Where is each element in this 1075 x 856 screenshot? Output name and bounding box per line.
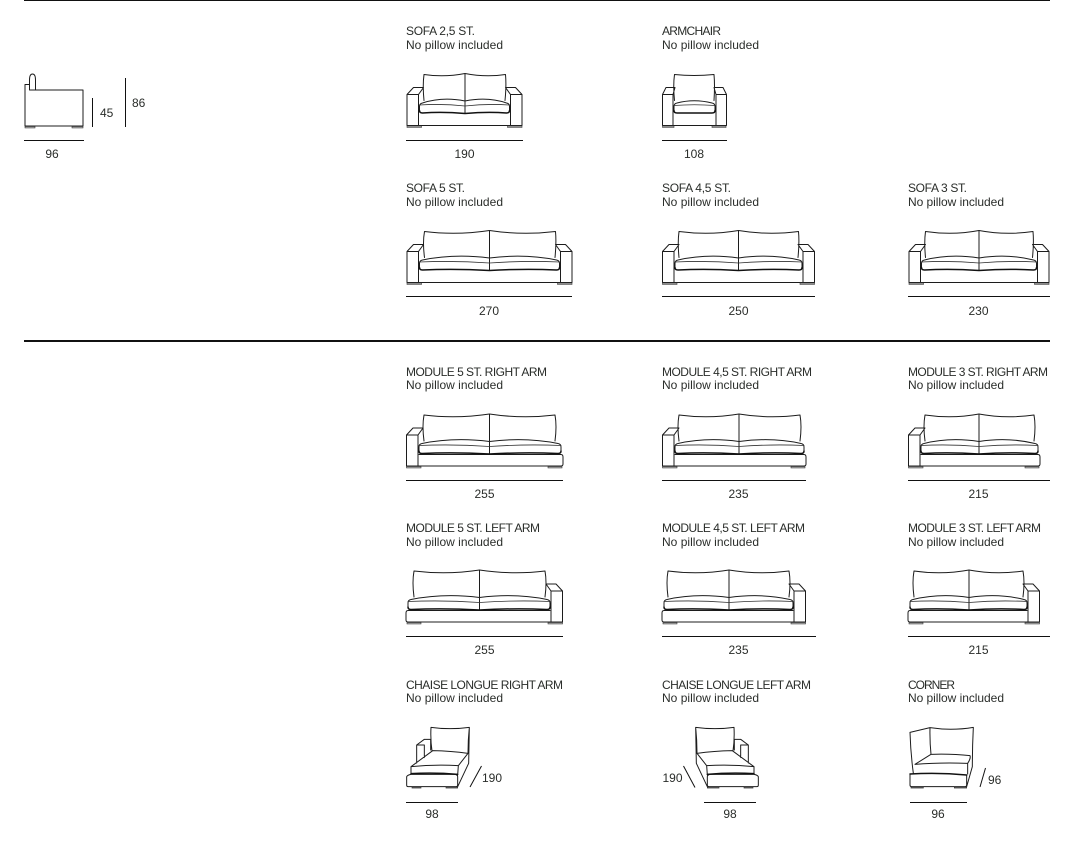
dimension: width 235: 235: [728, 487, 749, 501]
label: SOFA 4,5 ST.: [662, 181, 731, 195]
label: [662, 521, 805, 549]
dimension: seat height: 45: [100, 106, 114, 120]
dimension: depth 190: [470, 766, 502, 787]
dimension: width 255: 255: [474, 643, 495, 657]
dimension: width 96: [910, 802, 967, 821]
label: No pillow included: [662, 535, 759, 549]
dimension: depth 96: [980, 768, 1002, 787]
label: [406, 678, 563, 705]
label: [406, 24, 503, 52]
label: MODULE 4,5 ST. RIGHT ARM: [662, 365, 812, 379]
icon: armchair: [662, 74, 726, 128]
icon: module 3 right arm: [908, 414, 1040, 468]
label: No pillow included: [908, 535, 1004, 549]
icon: chaise left arm: [696, 727, 758, 788]
chaise longue left arm: [662, 678, 811, 821]
label: SOFA 5 ST.: [406, 181, 465, 195]
icon: chaise right arm: [407, 727, 469, 788]
icon: module 3 left arm: [908, 570, 1040, 624]
section divider: [24, 340, 1050, 342]
dimension: width 250: 250: [728, 304, 749, 318]
icon: sofa 3: [909, 230, 1049, 284]
label: [908, 181, 1004, 209]
sofa 2,5 seats: [406, 24, 523, 161]
dimension: width 108: 108: [684, 147, 704, 161]
icon: module 4,5 left arm: [662, 570, 806, 624]
module 5 left arm: [406, 521, 563, 657]
label: CORNER: [908, 678, 955, 692]
label: No pillow included: [406, 378, 503, 392]
label: SOFA 3 ST.: [908, 181, 967, 195]
label: ARMCHAIR: [662, 24, 721, 38]
dimension: width 215: 215: [968, 487, 989, 501]
label: MODULE 3 ST. LEFT ARM: [908, 521, 1041, 535]
label: MODULE 3 ST. RIGHT ARM: [908, 365, 1048, 379]
armchair: [662, 24, 759, 161]
side profile diagram with dimensions: [24, 74, 146, 161]
dimension: width 98: [704, 802, 756, 821]
dimension: width 230: 230: [968, 304, 989, 318]
label: MODULE 4,5 ST. LEFT ARM: [662, 521, 805, 535]
label: [662, 365, 812, 392]
module 4,5 right arm: [662, 365, 812, 501]
label: No pillow included: [908, 195, 1004, 209]
label: [662, 24, 759, 52]
dimension: depth: 96: [45, 147, 59, 161]
label: [406, 521, 540, 549]
label: No pillow included: [406, 195, 503, 209]
module 3 right arm: [908, 365, 1050, 501]
dimension: depth 96: 96: [988, 773, 1002, 787]
label: No pillow included: [406, 535, 503, 549]
label: No pillow included: [406, 38, 503, 52]
corner: [908, 678, 1004, 821]
module 3 left arm: [908, 521, 1050, 657]
label: [662, 181, 759, 209]
label: MODULE 5 ST. LEFT ARM: [406, 521, 540, 535]
label: [908, 678, 1004, 705]
dimension: width 190: 190: [454, 147, 475, 161]
icon: sofa 4,5: [662, 230, 814, 284]
top rule: [24, 0, 1050, 1]
label: No pillow included: [406, 691, 503, 705]
dimension: total height: 86: [132, 96, 146, 110]
dimension: depth 190: 190: [482, 771, 502, 785]
dimension: width 235: 235: [728, 643, 749, 657]
label: No pillow included: [662, 38, 759, 52]
module 5 right arm: [406, 365, 563, 501]
icon: corner: [910, 727, 973, 788]
label: MODULE 5 ST. RIGHT ARM: [406, 365, 547, 379]
icon: module 5 right arm: [406, 414, 563, 468]
icon: module 4,5 right arm: [662, 414, 806, 468]
module 4,5 left arm: [662, 521, 816, 657]
chaise longue right arm: [406, 678, 563, 821]
label: No pillow included: [662, 195, 759, 209]
label: CHAISE LONGUE RIGHT ARM: [406, 678, 563, 692]
label: No pillow included: [908, 691, 1004, 705]
dimension: depth 190: 190: [662, 771, 683, 785]
dimension: depth 190: [662, 766, 695, 788]
label: [406, 181, 503, 209]
label: No pillow included: [662, 378, 759, 392]
sofa 3 seats: [908, 181, 1050, 318]
label: [662, 678, 811, 705]
dimension: width 270: 270: [479, 304, 499, 318]
label: [908, 521, 1041, 549]
dimension: width 215: 215: [968, 643, 989, 657]
dimension: width 98: [406, 802, 458, 821]
sofa 4,5 seats: [662, 181, 815, 318]
icon: sofa 2,5: [407, 74, 522, 128]
sofa 5 seats: [406, 181, 572, 318]
dimension: width 96: 96: [931, 807, 945, 821]
icon: sofa side profile: [25, 74, 83, 128]
label: [406, 365, 547, 392]
label: [908, 365, 1048, 392]
label: CHAISE LONGUE LEFT ARM: [662, 678, 811, 692]
icon: module 5 left arm: [406, 570, 562, 624]
icon: sofa 5: [407, 230, 572, 284]
label: No pillow included: [662, 691, 759, 705]
dimension: width 98: 98: [425, 807, 439, 821]
label: No pillow included: [908, 378, 1004, 392]
dimension: width 255: 255: [474, 487, 495, 501]
dimension: width 98: 98: [723, 807, 737, 821]
label: SOFA 2,5 ST.: [406, 24, 475, 38]
